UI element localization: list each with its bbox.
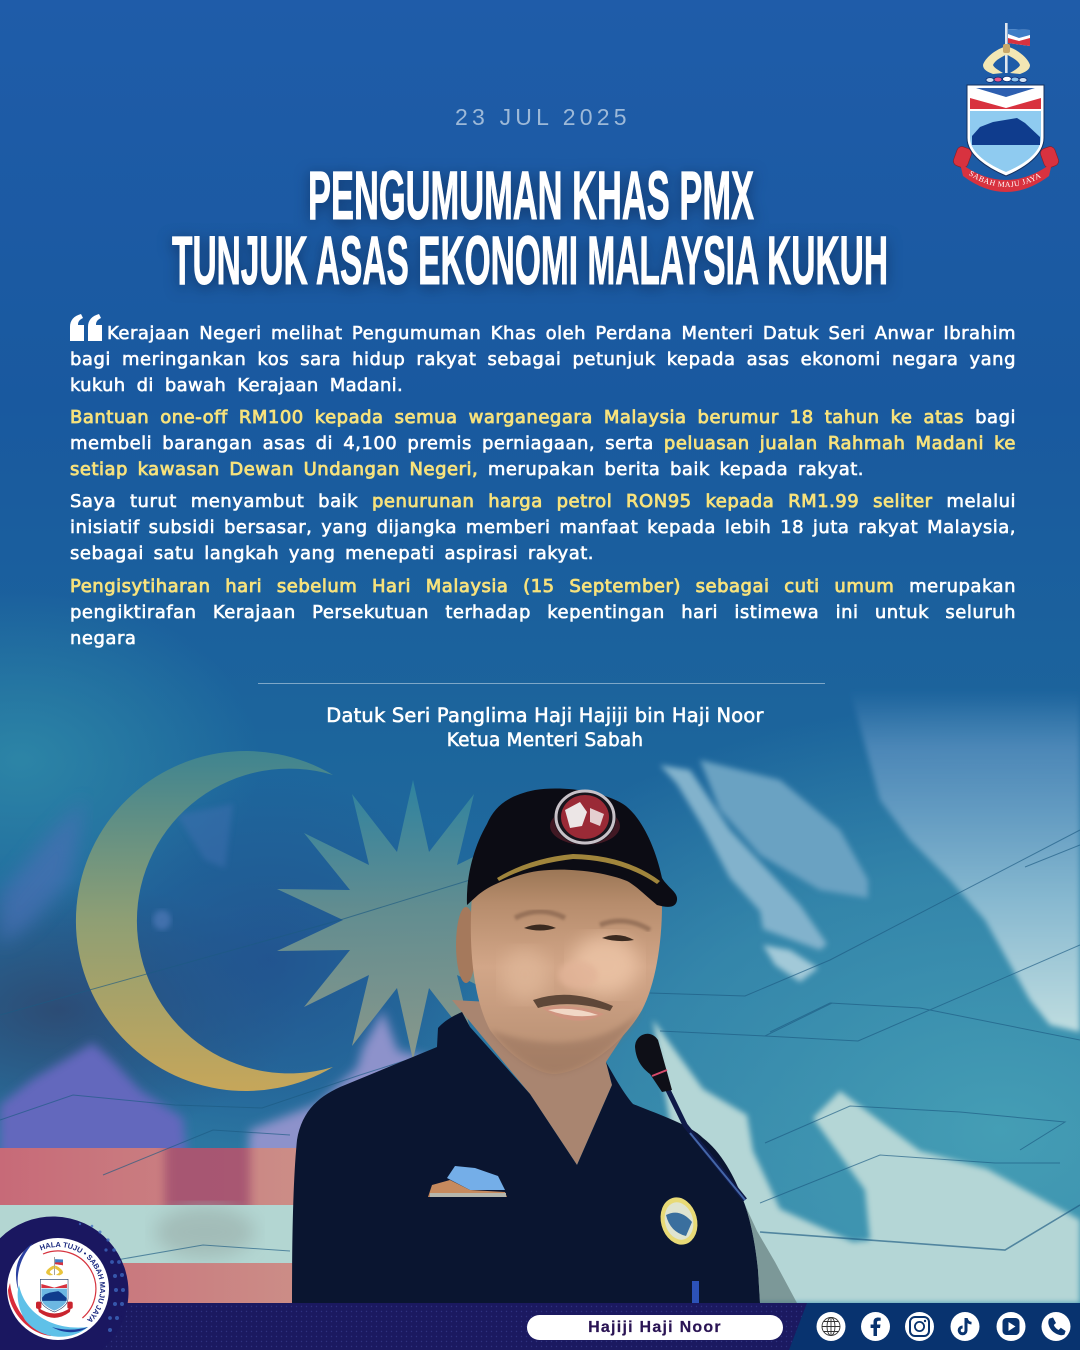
- icon: phone: [1042, 1312, 1070, 1341]
- flag stripes: [0, 1148, 296, 1303]
- paragraph 4: Pengisytiharan hari sebelum Hari Malaysia (15 September) sebagai cuti umum merupakan: [70, 576, 1016, 597]
- eyes: [524, 924, 556, 930]
- paragraph 3: Saya turut menyambut baik penurunan harga petrol RON95 kepada RM1.99 seliter melalui: [70, 491, 1016, 512]
- state crest, top right: [953, 23, 1059, 192]
- paragraph 3: inisiatif subsidi bersasar, yang dijangka memberi manfaat kepada lebih 18 juta rakyat Malaysia,: [70, 517, 1016, 538]
- paragraph 4: negara: [70, 628, 136, 649]
- paragraph 2: [70, 407, 1016, 480]
- shield: [967, 85, 1044, 176]
- pen: [692, 1281, 699, 1303]
- fourteen-point star: [277, 780, 549, 1060]
- paragraph 1: kukuh di bawah Kerajaan Madani.: [70, 375, 403, 396]
- neck: [452, 1000, 640, 1165]
- right hand-light shapes: [653, 690, 1080, 1303]
- brows: [515, 912, 650, 930]
- icon: youtube play: [996, 1312, 1026, 1341]
- shirt pin: [655, 1193, 703, 1249]
- paragraph 1: Kerajaan Negeri melihat Pengumuman Khas oleh Perdana Menteri Datuk Seri Anwar Ibrahim: [107, 323, 1016, 344]
- date: 23 JUL 2025: [455, 104, 631, 130]
- arms holding pole: [983, 44, 1030, 74]
- circuit lines: [0, 830, 1080, 1262]
- main portrait: man in black cap and polo shirt: [292, 789, 797, 1303]
- microphone: [635, 1034, 745, 1200]
- cap badge: [550, 791, 620, 845]
- paragraph 2: setiap kawasan Dewan Undangan Negeri, merupakan berita baik kepada rakyat.: [70, 459, 864, 480]
- ribbon: [953, 146, 1059, 192]
- divider: [258, 683, 825, 684]
- footer name label: Hajiji Haji Noor: [588, 1319, 722, 1336]
- badge: Hala Tuju Sabah Maju Jaya: [0, 1216, 128, 1348]
- icon: facebook: [861, 1312, 890, 1341]
- icon: tiktok: [950, 1312, 980, 1341]
- moustache: [533, 995, 613, 1011]
- left purple hand-light shapes: [0, 1011, 440, 1160]
- paragraph 1: bagi meringankan kos sara hidup rakyat sebagai petunjuk kepada asas ekonomi negara yang: [70, 349, 1016, 370]
- signature: name and title: [326, 704, 764, 751]
- shirt logo: [428, 1166, 507, 1197]
- cap: [467, 789, 677, 907]
- paragraph 2: Bantuan one-off RM100 kepada semua warganegara Malaysia berumur 18 tahun ke atas bagi: [70, 407, 1016, 428]
- signature: name and title: Ketua Menteri Sabah: [447, 730, 643, 751]
- icon: opening quote mark: [70, 314, 102, 341]
- paragraph 3: sebagai satu langkah yang menepati aspirasi rakyat.: [70, 543, 594, 564]
- ear: [456, 907, 476, 983]
- footer name pill: [527, 1315, 783, 1340]
- body text: quote: [70, 323, 1016, 649]
- crescent moon: [76, 751, 333, 1091]
- polo shirt: [292, 1012, 760, 1303]
- ribbon: SABAH MAJU JAYA: [969, 171, 1042, 187]
- paragraph 3: [70, 491, 1016, 564]
- mouth: [542, 1006, 604, 1021]
- face: [471, 860, 662, 1074]
- title: [168, 157, 893, 299]
- flag and pole: [1005, 23, 1030, 73]
- footer bar: [0, 1303, 1080, 1350]
- wreath: [986, 76, 1027, 82]
- paragraph 4: [70, 576, 1016, 649]
- icon: website: [816, 1312, 846, 1341]
- signature: name and title: Datuk Seri Panglima Haji Hajiji bin Haji Noor: [326, 704, 764, 727]
- mini crest inside badge: [36, 1257, 73, 1318]
- social icons row: [816, 1312, 1070, 1341]
- icon: instagram: [905, 1312, 934, 1341]
- paragraph 2: membeli barangan asas di 4,100 premis perniagaan, serta peluasan jualan Rahmah Madani ke: [70, 433, 1016, 454]
- paragraph 1: [70, 323, 1016, 396]
- badge ring text: HALA TUJU • SABAH MAJU JAYA: [40, 1242, 106, 1322]
- paragraph 4: pengiktirafan Kerajaan Persekutuan terhadap kepentingan hari istimewa ini untuk seluruh: [70, 602, 1016, 623]
